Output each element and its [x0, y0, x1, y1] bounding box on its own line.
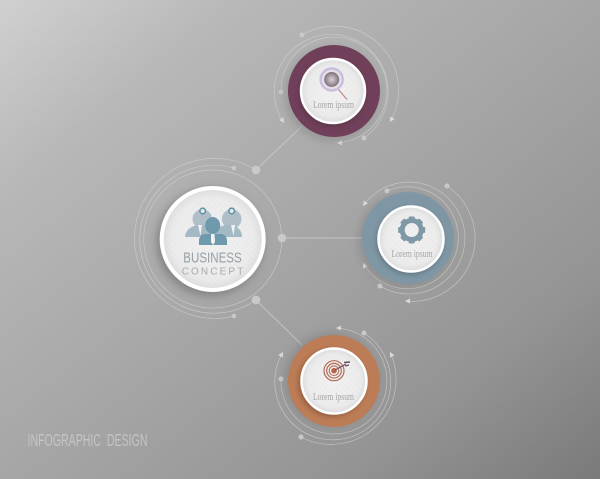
panel: right node — [358, 182, 475, 304]
connector: center to right — [282, 237, 366, 239]
panel: bottom node — [275, 326, 396, 444]
panel: top node — [274, 26, 398, 145]
orbit arcs — [135, 158, 286, 318]
icon: target — [324, 361, 350, 381]
orbit arcs with arrows — [274, 26, 398, 145]
plum ring — [288, 45, 380, 137]
colored ring shadow — [284, 47, 378, 141]
icon: gear — [398, 216, 425, 244]
slate ring — [362, 192, 454, 284]
footer title: INFOGRAPHIC DESIGN — [28, 430, 148, 450]
orbit arcs with arrows — [361, 182, 475, 304]
icon: magnifier — [321, 68, 347, 100]
copper ring — [288, 335, 380, 427]
white disc shadow — [299, 60, 365, 126]
colored ring shadow — [358, 193, 452, 287]
panel: central node — [135, 158, 286, 318]
icon: business people — [185, 208, 242, 245]
connector: center to bottom — [256, 300, 302, 345]
colored ring shadow — [284, 332, 378, 426]
label: Lorem ipsum — [313, 100, 354, 111]
label: Lorem ipsum — [392, 249, 433, 260]
orbit arcs with arrows — [275, 326, 396, 444]
white disc — [301, 59, 365, 123]
white disc — [162, 188, 264, 290]
label: Lorem ipsum — [313, 392, 354, 403]
white disc shadow — [376, 207, 444, 275]
white disc shadow — [298, 349, 366, 417]
white disc — [378, 206, 444, 272]
white disc shadow — [156, 188, 264, 296]
heading: concept: CONCEPT — [182, 266, 243, 278]
white disc — [302, 348, 366, 414]
connector: center to top — [256, 126, 302, 170]
heading: business: BUSINESS — [183, 250, 242, 266]
